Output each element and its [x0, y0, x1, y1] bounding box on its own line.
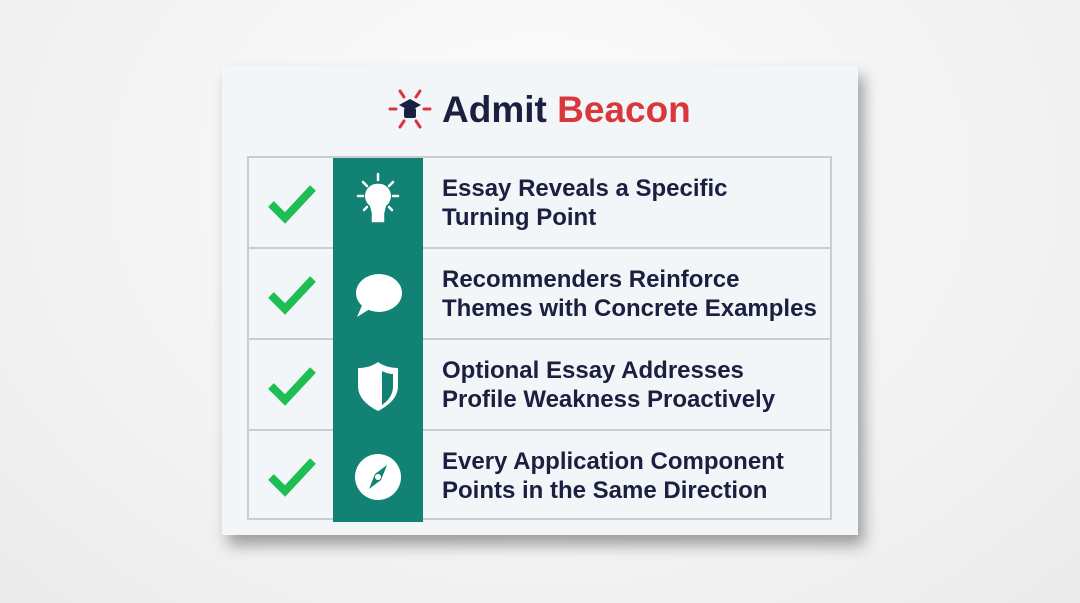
icon: speech bubble — [333, 249, 423, 340]
text — [442, 356, 775, 412]
text — [442, 174, 728, 230]
row 1 — [249, 158, 830, 249]
icon: lightbulb — [333, 158, 423, 249]
text — [442, 266, 817, 322]
row 3 — [249, 340, 830, 431]
text: Essay Reveals a Specific — [442, 174, 728, 202]
text — [442, 448, 784, 504]
card — [222, 66, 858, 535]
icon: check — [268, 367, 316, 406]
row 2 — [249, 249, 830, 340]
text: Turning Point — [442, 204, 596, 230]
text: Profile Weakness Proactively — [442, 386, 775, 412]
title: logo: Admit Beacon — [442, 89, 691, 130]
text: Optional Essay Addresses — [442, 356, 744, 384]
icon: compass — [333, 431, 423, 522]
text: Recommenders Reinforce — [442, 266, 739, 292]
icon: check — [268, 458, 316, 497]
text: Every Application Component — [442, 448, 784, 474]
row 4 — [268, 431, 784, 522]
table — [247, 156, 832, 520]
icon: check — [268, 185, 316, 224]
text: Points in the Same Direction — [442, 476, 767, 504]
icon: check — [268, 276, 316, 315]
icon: beacon cap — [390, 91, 430, 127]
icon: shield — [333, 340, 423, 431]
text: Themes with Concrete Examples — [442, 294, 817, 322]
